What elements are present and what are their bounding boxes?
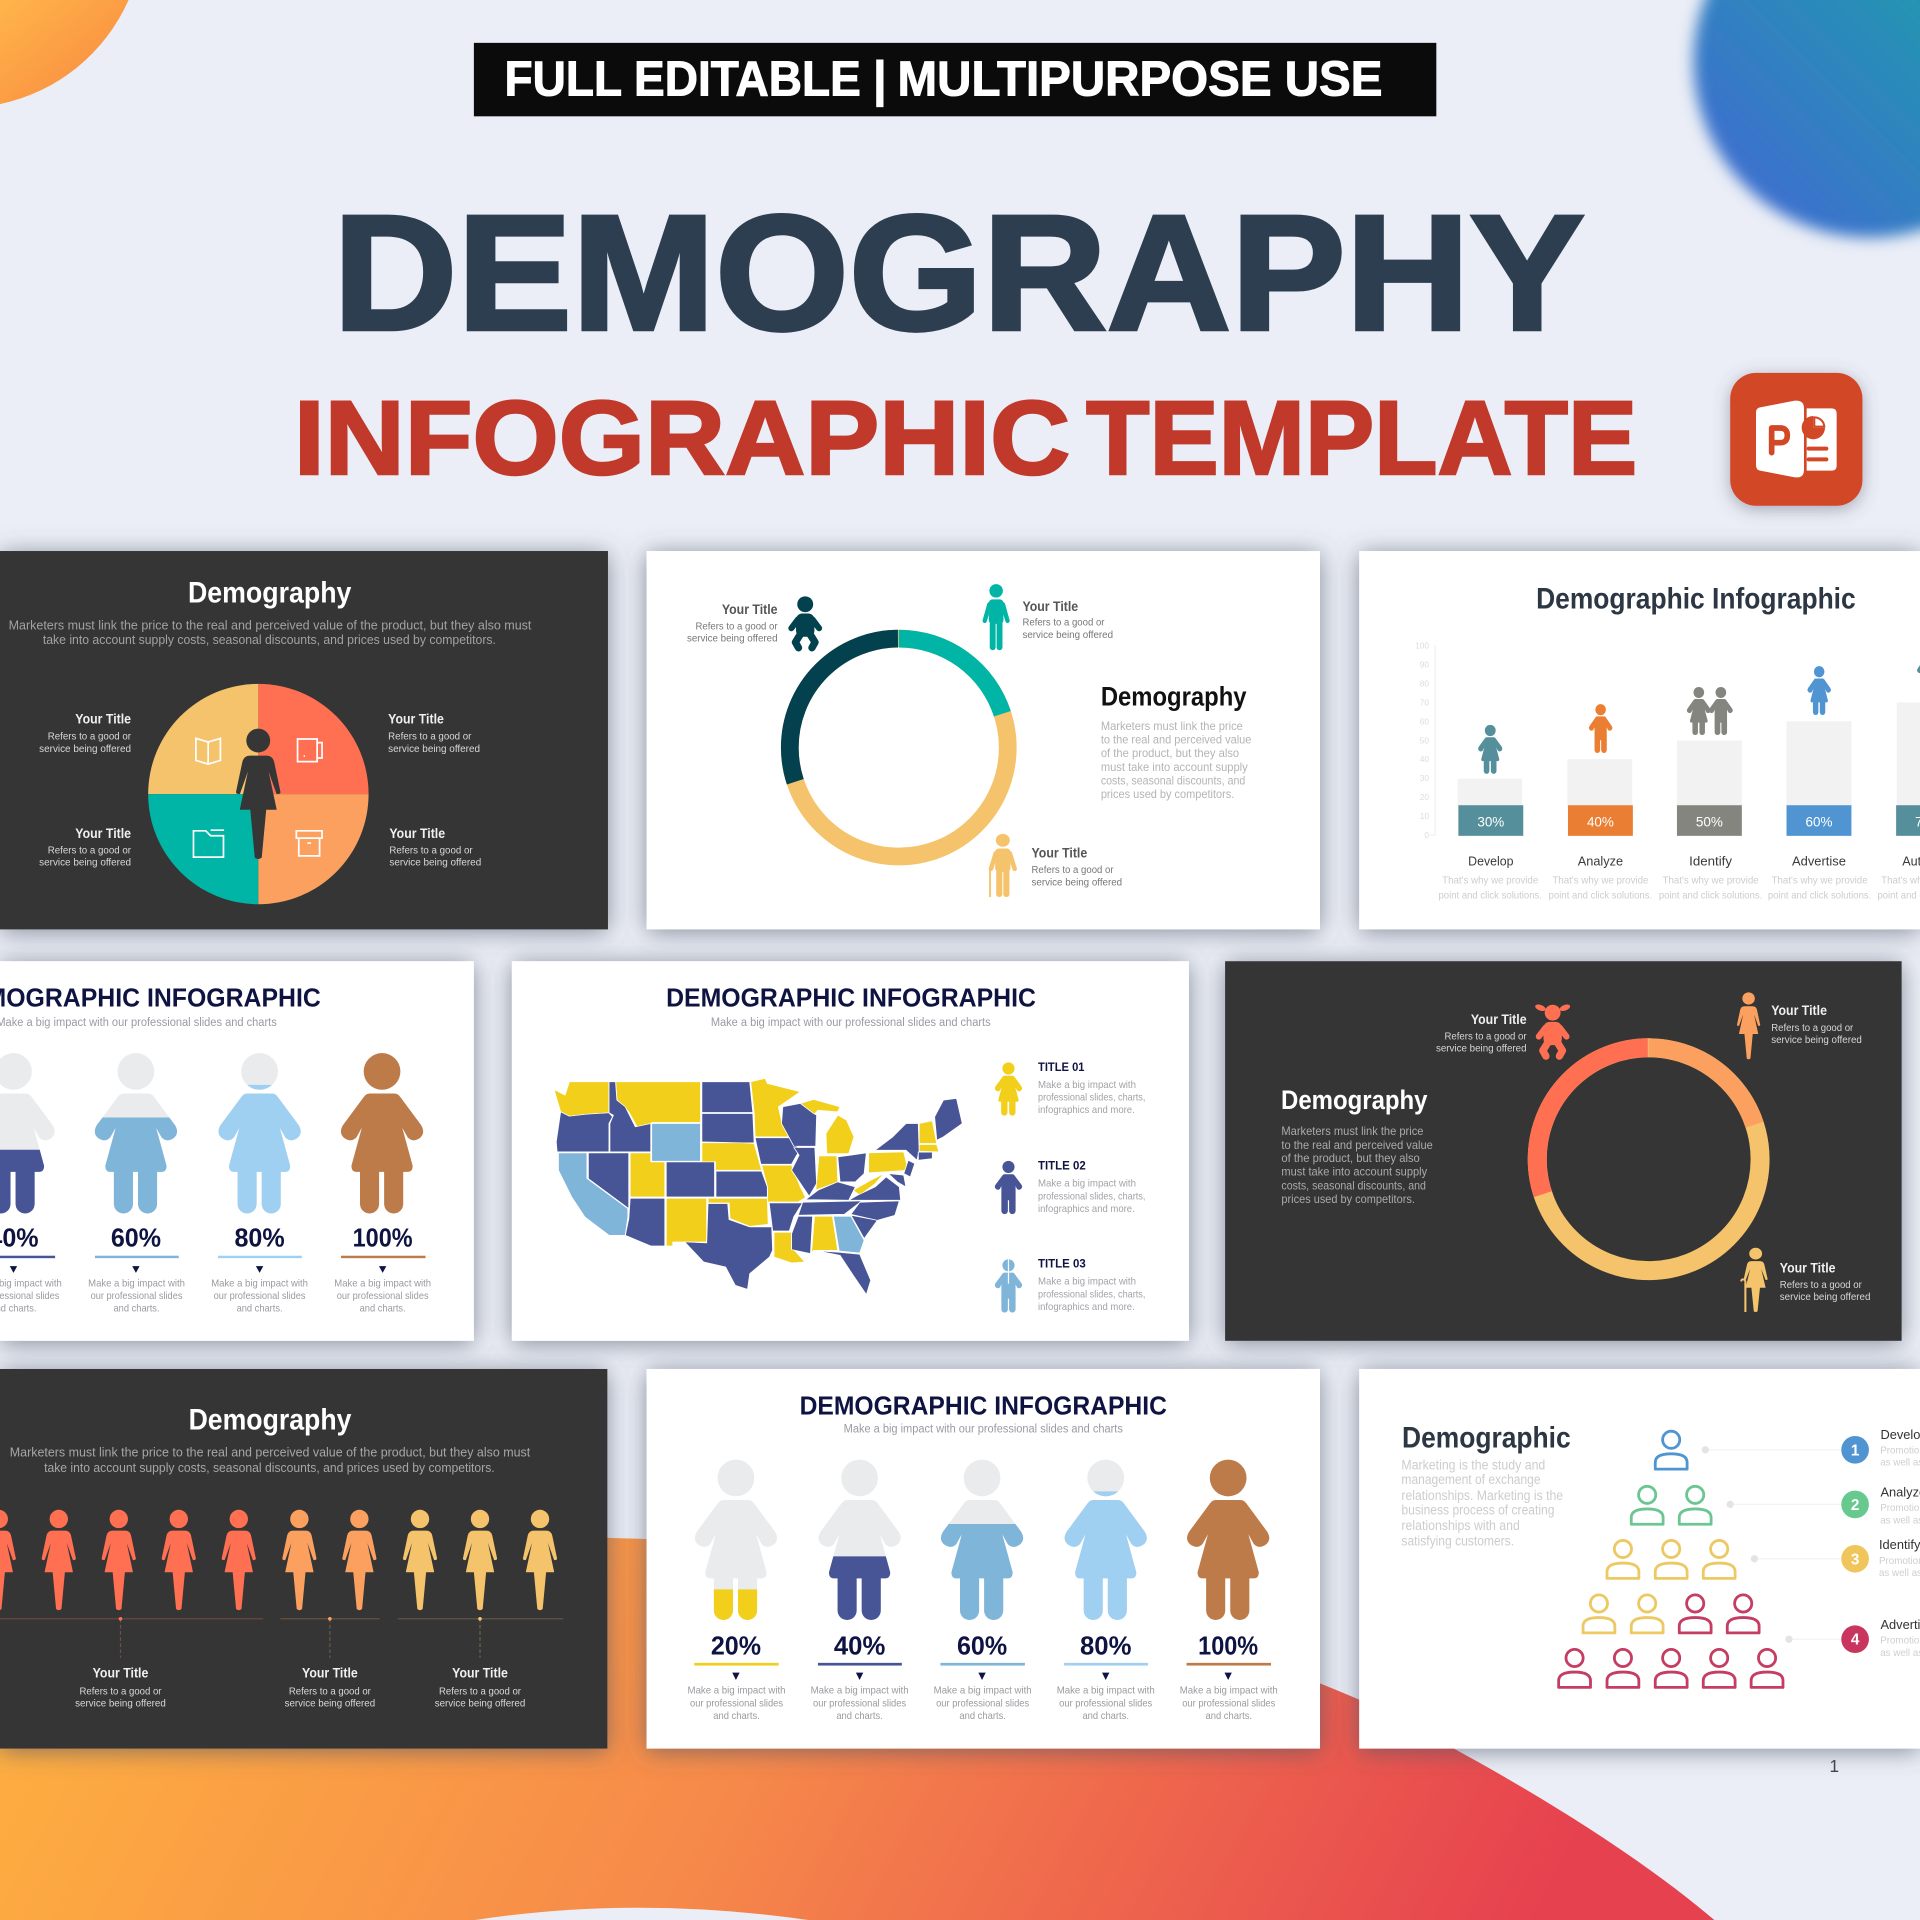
percent values: 80% xyxy=(234,1225,285,1253)
descriptions: and charts. xyxy=(360,1303,406,1314)
intro text: take into account supply costs, seasonal discounts, and prices used by competitors. xyxy=(43,632,496,647)
paragraph: relationships with and xyxy=(1401,1518,1520,1533)
label baby girl: service being offered xyxy=(1436,1042,1527,1054)
label woman: Refers to a good or xyxy=(1771,1022,1854,1034)
label baby xyxy=(687,602,778,645)
icon: teal man xyxy=(985,584,1008,650)
paragraph: Marketers must link the price xyxy=(1281,1124,1424,1138)
panel: white ring slide xyxy=(647,551,1320,929)
descriptions: and charts. xyxy=(1206,1711,1252,1722)
descriptions: Make a big impact with xyxy=(688,1685,786,1696)
paragraph: Marketers must link the price xyxy=(1101,719,1243,733)
map of the United States xyxy=(554,1078,962,1295)
icon: PowerPoint app xyxy=(1730,373,1862,506)
icon: blue split figure xyxy=(995,1259,1022,1313)
bar descriptions: That's why we provide xyxy=(1442,876,1539,887)
percent values: 20% xyxy=(711,1632,761,1660)
label baby: Refers to a good or xyxy=(696,620,778,632)
label bottom right: Refers to a good or xyxy=(389,844,473,856)
heading: Demographic xyxy=(1402,1421,1571,1454)
item 01: professional slides, charts, xyxy=(1038,1092,1145,1103)
descriptions: Make a big impact with xyxy=(334,1278,431,1289)
descriptions: our professional slides xyxy=(214,1291,306,1302)
subtitle: Infographic Template: INFOGRAPHIC xyxy=(294,380,1070,497)
banner: full editable xyxy=(474,43,1436,116)
label old man: Your Title xyxy=(1032,846,1088,861)
heading: Demography xyxy=(188,576,352,609)
label bottom right xyxy=(389,826,481,869)
icon: book xyxy=(196,738,220,764)
title: Demography: DEMOGRAPHY xyxy=(333,180,1584,364)
label man: service being offered xyxy=(1022,629,1113,641)
paragraph: costs, seasonal discounts, and xyxy=(1101,774,1245,788)
banner: full editable: MULTIPURPOSE USE xyxy=(898,53,1382,107)
label old man: service being offered xyxy=(1032,876,1122,888)
bar labels: Develop xyxy=(1468,854,1513,869)
label bottom left xyxy=(39,826,131,869)
panel: percentage people slide, cropped xyxy=(0,961,474,1341)
paragraph: to the real and perceived value xyxy=(1101,733,1252,747)
intro text: take into account supply costs, seasonal discounts, and prices used by competitors. xyxy=(44,1460,495,1475)
step 3: 3 xyxy=(1851,1551,1859,1568)
percent values xyxy=(0,1225,413,1253)
paragraph: prices used by competitors. xyxy=(1101,787,1234,801)
icon: navy male xyxy=(995,1161,1022,1214)
subtitle: Infographic Template: TEMPLATE xyxy=(1086,380,1637,497)
axis: 90 xyxy=(1420,659,1429,669)
label woman xyxy=(1771,1003,1862,1046)
label top left: Refers to a good or xyxy=(48,731,131,743)
subheading: Make a big impact with our professional slides and charts xyxy=(711,1015,991,1029)
descriptions: our professional slides xyxy=(1182,1698,1275,1709)
label man: Refers to a good or xyxy=(1022,617,1105,629)
descriptions: our professional slides xyxy=(813,1698,906,1709)
descriptions: our professional slides xyxy=(91,1291,183,1302)
label two: service being offered xyxy=(285,1697,375,1709)
icon: old woman with cane xyxy=(1741,1248,1768,1312)
label man: Your Title xyxy=(1022,599,1079,614)
descriptions: Make a big impact with xyxy=(1057,1685,1155,1696)
descriptions: our professional slides xyxy=(936,1698,1029,1709)
icon: baby xyxy=(791,596,819,648)
axis: 40 xyxy=(1420,754,1429,764)
paragraph: must take into account supply xyxy=(1101,760,1249,774)
panel: US map slide xyxy=(512,961,1189,1341)
label old man xyxy=(1032,846,1122,888)
label woman: service being offered xyxy=(1771,1034,1862,1046)
descriptions: and charts. xyxy=(959,1711,1006,1722)
panel: people pyramid slide xyxy=(1359,1369,1920,1749)
label bottom left: Refers to a good or xyxy=(48,844,131,856)
step 3 xyxy=(1841,1537,1920,1579)
icon: device xyxy=(298,739,322,762)
item 03: infographics and more. xyxy=(1038,1302,1135,1313)
bar descriptions: point and click solutions. xyxy=(1438,890,1542,901)
item 02 xyxy=(1038,1158,1145,1215)
paragraph xyxy=(1101,719,1252,801)
label three xyxy=(435,1666,525,1709)
label old woman: service being offered xyxy=(1780,1291,1871,1303)
percent values: 100% xyxy=(1198,1632,1258,1660)
heading: Demography xyxy=(1101,681,1247,711)
decorative orange circle top-left xyxy=(0,0,129,104)
label baby: Your Title xyxy=(722,602,778,617)
descriptions xyxy=(688,1685,1278,1722)
axis: 100 xyxy=(1415,640,1429,650)
descriptions: Make a big impact with xyxy=(211,1278,308,1289)
panel: bar chart slide xyxy=(1359,551,1920,929)
subheading: Make a big impact with our professional slides and charts xyxy=(844,1422,1123,1436)
subtitle: Infographic Template xyxy=(294,380,1637,497)
paragraph: to the real and perceived value xyxy=(1281,1138,1433,1152)
label bottom left: service being offered xyxy=(39,857,131,869)
panel: dark pie chart slide xyxy=(0,551,608,929)
paragraph xyxy=(1281,1124,1433,1206)
page number: 1 xyxy=(1830,1756,1839,1776)
bar 50% Identify: 50% xyxy=(1696,815,1723,830)
item 01: infographics and more. xyxy=(1038,1105,1135,1116)
step 2: 2 xyxy=(1851,1497,1859,1514)
bar descriptions: point and click solutions. xyxy=(1768,890,1871,901)
label top right: Refers to a good or xyxy=(388,731,472,743)
heading: DEMOGRAPHIC INFOGRAPHIC xyxy=(666,985,1036,1013)
label baby girl: Refers to a good or xyxy=(1445,1031,1527,1043)
item 02: Make a big impact with xyxy=(1038,1179,1136,1190)
figure 80% xyxy=(218,1053,301,1213)
intro text: Marketers must link the price to the real and perceived value of the product, but they also must xyxy=(9,617,532,632)
item 01 xyxy=(1038,1060,1145,1116)
label one xyxy=(75,1666,166,1709)
subheading: Make a big impact with our professional slides and charts xyxy=(0,1015,277,1029)
paragraph: of the product, but they also xyxy=(1281,1151,1420,1165)
heading: Demographic Infographic xyxy=(1536,583,1856,616)
label bottom left: Your Title xyxy=(75,826,131,841)
step 1 xyxy=(1841,1427,1920,1469)
axis: 30 xyxy=(1420,773,1429,783)
icon: baby girl xyxy=(1534,1003,1571,1056)
item 03: Make a big impact with xyxy=(1038,1276,1136,1287)
panel: five percentage people slide xyxy=(647,1369,1320,1749)
axis: 0 xyxy=(1424,830,1429,840)
bracket lines and markers xyxy=(0,1617,563,1658)
label top left: service being offered xyxy=(39,743,131,755)
icon: woman silhouette xyxy=(236,729,281,859)
figure 100% xyxy=(1187,1460,1269,1620)
bar descriptions xyxy=(1438,876,1920,901)
descriptions: and charts. xyxy=(1082,1711,1129,1722)
percent values: 60% xyxy=(111,1225,161,1253)
percent values xyxy=(711,1632,1258,1660)
figure 20% xyxy=(695,1460,777,1620)
item 02: infographics and more. xyxy=(1038,1204,1135,1215)
paragraph: management of exchange xyxy=(1401,1472,1541,1487)
label old woman xyxy=(1780,1261,1871,1303)
step 1: 1 xyxy=(1851,1442,1860,1459)
intro text xyxy=(9,617,532,647)
bar descriptions: point and click solutions. xyxy=(1659,890,1762,901)
label one: Your Title xyxy=(93,1666,149,1681)
bar 50% Identify xyxy=(1677,687,1742,836)
percent values: 80% xyxy=(1080,1632,1132,1660)
banner: full editable: | xyxy=(873,53,887,107)
rules and markers xyxy=(0,1256,426,1273)
paragraph: prices used by competitors. xyxy=(1281,1192,1415,1206)
bar 40% Analyze: 40% xyxy=(1587,815,1614,830)
icon: folder xyxy=(193,830,224,857)
label old man: Refers to a good or xyxy=(1032,864,1114,876)
percent values: 60% xyxy=(957,1632,1007,1660)
label two xyxy=(285,1666,375,1709)
descriptions: our professional slides xyxy=(1059,1698,1152,1709)
item 02: professional slides, charts, xyxy=(1038,1191,1145,1202)
item 03: professional slides, charts, xyxy=(1038,1289,1145,1300)
intro text xyxy=(10,1445,531,1475)
heading: Demography xyxy=(1281,1085,1428,1115)
paragraph: relationships. Marketing is the xyxy=(1401,1488,1563,1503)
bar labels xyxy=(1468,854,1920,869)
step 3: Identify xyxy=(1879,1537,1920,1552)
axis: 80 xyxy=(1420,678,1429,688)
descriptions xyxy=(0,1278,431,1314)
paragraph: satisfying customers. xyxy=(1401,1533,1514,1548)
figure 60% xyxy=(95,1053,177,1213)
label two: Refers to a good or xyxy=(289,1685,371,1697)
axis: 20 xyxy=(1420,792,1429,802)
heading: DEMOGRAPHIC INFOGRAPHIC xyxy=(800,1392,1167,1420)
ring chart xyxy=(1537,1048,1760,1271)
row of women xyxy=(0,1510,557,1610)
descriptions: our professional slides xyxy=(337,1291,429,1302)
percent values: 40% xyxy=(834,1632,885,1660)
descriptions: our professional slides xyxy=(690,1698,783,1709)
bar 70% Automate xyxy=(1896,647,1920,836)
label baby girl xyxy=(1436,1012,1527,1054)
axis: 70 xyxy=(1420,697,1429,707)
figure 100% xyxy=(341,1053,423,1213)
bar 60% Advertise xyxy=(1787,666,1851,836)
label top left: Your Title xyxy=(75,712,131,727)
label man xyxy=(1022,599,1113,641)
icon: box xyxy=(296,831,322,856)
label baby: service being offered xyxy=(687,633,778,645)
item 01: TITLE 01 xyxy=(1038,1060,1085,1074)
descriptions: Make a big impact with xyxy=(811,1685,909,1696)
label bottom right: Your Title xyxy=(389,826,446,841)
label baby girl: Your Title xyxy=(1471,1012,1527,1027)
bar labels: Identify xyxy=(1689,854,1733,869)
axis: 50 xyxy=(1420,735,1429,745)
step 4: 4 xyxy=(1851,1631,1860,1648)
label top right: Your Title xyxy=(388,712,444,727)
paragraph: of the product, but they also xyxy=(1101,746,1239,760)
item 03: TITLE 03 xyxy=(1038,1256,1086,1270)
descriptions: and charts. xyxy=(713,1711,760,1722)
bar descriptions: That's why we provide xyxy=(1663,876,1759,887)
label one: Refers to a good or xyxy=(79,1685,162,1697)
descriptions: Make a big impact with xyxy=(1180,1685,1278,1696)
banner: full editable: FULL EDITABLE xyxy=(504,53,861,107)
bar 30% Develop xyxy=(1458,725,1523,836)
label old woman: Refers to a good or xyxy=(1780,1279,1862,1291)
figure 40% xyxy=(0,1053,55,1213)
item 02: TITLE 02 xyxy=(1038,1158,1086,1172)
label bottom right: service being offered xyxy=(389,857,481,869)
pie chart xyxy=(148,684,369,904)
step 4 xyxy=(1841,1617,1920,1659)
decorative blue circle top-right xyxy=(1693,0,1920,238)
connector lines and dots xyxy=(1702,1446,1843,1643)
people pyramid xyxy=(1559,1431,1783,1687)
percent values: 100% xyxy=(353,1225,413,1253)
heading: Demography xyxy=(189,1403,352,1436)
item 01: Make a big impact with xyxy=(1038,1080,1136,1091)
item 03 xyxy=(1038,1256,1145,1313)
ring chart xyxy=(790,639,1008,857)
bar labels: Advertise xyxy=(1792,854,1846,869)
bar 60% Advertise: 60% xyxy=(1806,815,1832,830)
paragraph: costs, seasonal discounts, and xyxy=(1281,1179,1426,1193)
bar 30% Develop: 30% xyxy=(1477,815,1504,830)
icon: woman xyxy=(1737,992,1760,1059)
bar 40% Analyze xyxy=(1567,704,1633,836)
label one: service being offered xyxy=(75,1697,166,1709)
label three: service being offered xyxy=(435,1697,525,1709)
intro text: Marketers must link the price to the real and perceived value of the product, but they also must xyxy=(10,1445,531,1460)
figure 80% xyxy=(1065,1460,1147,1620)
figure 60% xyxy=(941,1460,1023,1620)
descriptions: and charts. xyxy=(237,1303,283,1314)
descriptions: Make a big impact with xyxy=(934,1685,1032,1696)
bar descriptions: That's why we provide xyxy=(1552,876,1649,887)
rules and markers xyxy=(694,1663,1271,1680)
descriptions: and charts. xyxy=(114,1303,160,1314)
label top right xyxy=(388,712,480,755)
label three: Your Title xyxy=(452,1666,508,1681)
label top right: service being offered xyxy=(388,743,480,755)
paragraph xyxy=(1401,1457,1563,1548)
bar descriptions: That's why we provide xyxy=(1772,876,1868,887)
descriptions: Make a big impact with xyxy=(88,1278,185,1289)
axis: 10 xyxy=(1420,811,1429,821)
paragraph: must take into account supply xyxy=(1281,1165,1428,1179)
bar labels: Analyze xyxy=(1578,854,1623,869)
descriptions: and charts. xyxy=(836,1711,883,1722)
label three: Refers to a good or xyxy=(439,1685,521,1697)
step 2 xyxy=(1841,1484,1920,1526)
figure 40% xyxy=(818,1460,901,1620)
panel: dark ring slide xyxy=(1225,961,1902,1341)
label top left xyxy=(39,712,131,755)
paragraph: business process of creating xyxy=(1401,1503,1554,1518)
label woman: Your Title xyxy=(1771,1003,1827,1018)
icon: old man with cane xyxy=(990,834,1015,897)
gradient wave bottom xyxy=(0,1536,1714,1920)
bar descriptions: point and click solutions. xyxy=(1549,890,1652,901)
label two: Your Title xyxy=(302,1666,358,1681)
paragraph: Marketing is the study and xyxy=(1401,1457,1545,1472)
label old woman: Your Title xyxy=(1780,1261,1836,1276)
panel: dark row of women slide xyxy=(0,1369,607,1749)
axis: 60 xyxy=(1420,716,1429,726)
axis xyxy=(1415,640,1435,840)
icon: yellow female xyxy=(995,1062,1022,1116)
